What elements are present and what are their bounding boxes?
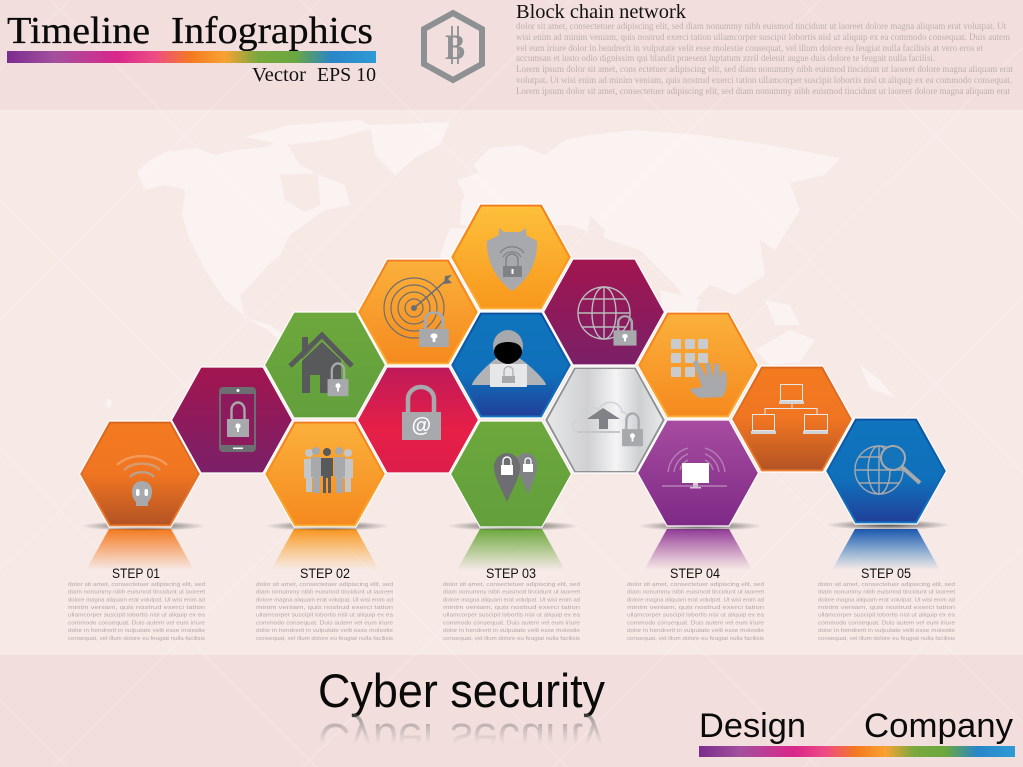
title: Infographics <box>171 10 373 52</box>
step 02: STEP 02 <box>300 565 350 581</box>
step 05: STEP 05 <box>861 565 911 581</box>
step 04: consequat, vel illum dolore eu feugiat nulla facilisis <box>627 636 764 642</box>
step 01: minim veniam, quis nostrud exerci tation <box>68 605 205 611</box>
text block: header paragraph: vel eum iriure dolor in hendrerit in vulputate velit esse molestie consequat, vel illum dolore eu feugiat nulla facilisis at vero eros et <box>516 43 983 53</box>
step 05: diam nonummy nibh euismod tincidunt ut laoreet <box>818 590 955 596</box>
step 03: dolore magna aliquam erat volutpat. Ut wisi enim ad <box>443 597 580 603</box>
step 01 <box>68 565 206 642</box>
icon: bitcoin hexagon <box>424 13 482 80</box>
company label: Design <box>699 707 806 745</box>
subtitle: Vector EPS 10: Vector <box>252 64 306 86</box>
step 04: commodo consequat. Duis autem vel eum iriure <box>627 620 764 626</box>
hexagon: target lock <box>358 259 478 365</box>
step 05: ullamcorper suscipit lobortis nisl ut aliquip ex ea <box>818 613 956 619</box>
reflections and floor shadows <box>81 520 950 570</box>
step 02: diam nonummy nibh euismod tincidunt ut laoreet <box>256 590 393 596</box>
step 02: dolore magna aliquam erat volutpat. Ut wisi enim ad <box>256 597 393 603</box>
hexagon: skull wifi <box>80 421 200 527</box>
text block: header paragraph: dolor sit amet, consectetuer adipiscing elit, sed diam nonummy nibh euismod tincidunt ut laoreet dolore magna aliquam erat volutpat. Ut <box>516 21 1006 31</box>
title rainbow bar <box>7 51 376 63</box>
hexagon: home lock <box>264 312 386 418</box>
step 02: dolor sit amet, consectetuer adipiscing elit, sed <box>256 582 393 588</box>
hexagon: shield <box>450 204 572 310</box>
hexagon: wireless monitor <box>638 420 758 526</box>
step 05: consequat, vel illum dolore eu feugiat nulla facilisis <box>818 636 955 642</box>
step 05: dolore magna aliquam erat volutpat. Ut wisi enim ad <box>818 597 955 603</box>
world map <box>105 120 895 408</box>
text block: header paragraph: Lorem ipsum dolor sit amet, cons ectetuer adipiscing elit, sed diam nonummy nibh euismod tincidunt ut laoreet dolore magna aliquam erat <box>516 64 1013 74</box>
step 03: dolor in hendrerit in vulputate velit esse molestie <box>443 628 580 634</box>
icon: bitcoin hexagon: B <box>445 27 465 67</box>
hexagon: pins <box>450 421 572 527</box>
subtitle: Vector EPS 10 <box>252 64 376 86</box>
title: Timeline <box>7 10 150 52</box>
step 01: ullamcorper suscipit lobortis nisl ut aliquip ex ea <box>68 613 206 619</box>
subtitle: Vector EPS 10: EPS 10 <box>317 64 376 86</box>
step 02 <box>256 565 394 642</box>
step 04: dolor sit amet, consectetuer adipiscing elit, sed <box>627 582 764 588</box>
step 02: consequat, vel illum dolore eu feugiat nulla facilisis <box>256 636 393 642</box>
step 03: ullamcorper suscipit lobortis nisl ut aliquip ex ea <box>443 613 581 619</box>
title <box>7 10 373 52</box>
text block: header paragraph: Lorem ipsum dolor sit amet, consectetuer adipiscing elit, sed diam nonummy nibh euismod tincidunt ut laoreet dolore magna aliquam erat <box>516 86 1010 96</box>
company label <box>699 707 1013 745</box>
text block: header paragraph: accumsan et iusto odio dignissim qui blandit praesent luptatum zzril delenit augue duis dolore te feugait nulla facilisi. <box>516 53 935 63</box>
step 01: STEP 01 <box>112 565 160 581</box>
step 03: STEP 03 <box>486 565 536 581</box>
step 01: dolore magna aliquam erat volutpat. Ut wisi enim ad <box>68 597 205 603</box>
step 01: diam nonummy nibh euismod tincidunt ut laoreet <box>68 590 205 596</box>
step 05: dolor sit amet, consectetuer adipiscing elit, sed <box>818 582 955 588</box>
heading: Block chain network: Block chain network <box>516 2 686 23</box>
hexagon: people <box>264 421 386 527</box>
step 04: ullamcorper suscipit lobortis nisl ut aliquip ex ea <box>627 613 765 619</box>
step 01: dolor sit amet, consectetuer adipiscing elit, sed <box>68 582 205 588</box>
hexagon: globe search <box>826 418 946 524</box>
hexagon: cloud upload <box>544 367 666 473</box>
step 05 <box>818 565 956 642</box>
step 01: consequat, vel illum dolore eu feugiat nulla facilisis <box>68 636 205 642</box>
hexagon: network <box>732 366 852 472</box>
step 04 <box>627 565 765 642</box>
company rainbow bar <box>699 746 1015 757</box>
hexagon: hacker <box>450 312 572 418</box>
step 02: dolor in hendrerit in vulputate velit esse molestie <box>256 628 393 634</box>
heading: Cyber security: Cyber security <box>318 664 605 717</box>
company label: Company <box>864 707 1013 745</box>
step 05: minim veniam, quis nostrud exerci tation <box>818 605 955 611</box>
heading reflection: Cyber security <box>318 714 605 767</box>
hexagon: globe lock <box>544 259 664 365</box>
step 02: commodo consequat. Duis autem vel eum iriure <box>256 620 393 626</box>
step 03: dolor sit amet, consectetuer adipiscing elit, sed <box>443 582 580 588</box>
step 01: commodo consequat. Duis autem vel eum iriure <box>68 620 205 626</box>
step 03: diam nonummy nibh euismod tincidunt ut laoreet <box>443 590 580 596</box>
step 05: commodo consequat. Duis autem vel eum iriure <box>818 620 955 626</box>
step 05: dolor in hendrerit in vulputate velit esse molestie <box>818 628 955 634</box>
step 03: consequat, vel illum dolore eu feugiat nulla facilisis <box>443 636 580 642</box>
text block: header paragraph: volutpat. Ut wisi enim ad minim veniam, quis nostrud exerci tation ullamcorper suscipit lobortis nisl ut aliquip ex ea commodo consequat. <box>516 75 1012 85</box>
step 04: STEP 04 <box>670 565 720 581</box>
step 04: dolore magna aliquam erat volutpat. Ut wisi enim ad <box>627 597 764 603</box>
hexagon: phone lock <box>172 367 292 473</box>
step 02: ullamcorper suscipit lobortis nisl ut aliquip ex ea <box>256 613 394 619</box>
hexagon: email lock <box>358 367 478 473</box>
hexagon: email lock: @ <box>411 415 431 437</box>
step 04: diam nonummy nibh euismod tincidunt ut laoreet <box>627 590 764 596</box>
text block: header paragraph: wisi enim ad minim veniam, quis nostrud exerci tation ullamcorper suscipit lobortis nisl ut aliquip ex ea commodo consequat. Duis autem <box>516 32 1010 42</box>
step 04: minim veniam, quis nostrud exerci tation <box>627 605 764 611</box>
step 03: minim veniam, quis nostrud exerci tation <box>443 605 580 611</box>
step 03: commodo consequat. Duis autem vel eum iriure <box>443 620 580 626</box>
text block: header paragraph <box>516 21 1013 96</box>
step 04: dolor in hendrerit in vulputate velit esse molestie <box>627 628 764 634</box>
step 01: dolor in hendrerit in vulputate velit esse molestie <box>68 628 205 634</box>
step 02: minim veniam, quis nostrud exerci tation <box>256 605 393 611</box>
step 03 <box>443 565 581 642</box>
hexagon: keypad <box>638 312 758 418</box>
